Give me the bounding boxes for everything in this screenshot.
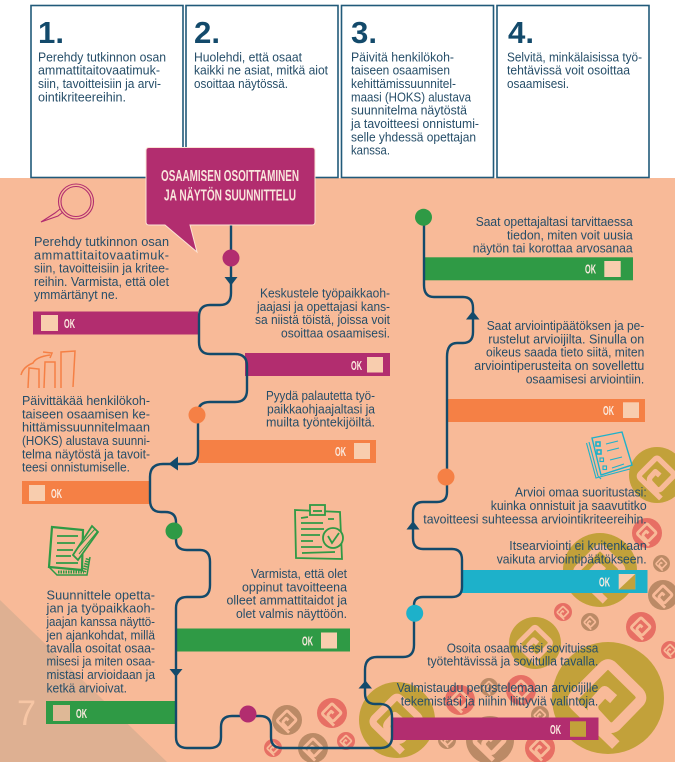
text: varmista: olet valmis näyttöön.: [236, 607, 347, 621]
text: päivittäkää: [22, 394, 150, 475]
step box 4: Selvitä, minkälaisissa työ-: [507, 50, 642, 64]
text: varmista: Varmista, että olet: [251, 567, 347, 581]
text: osoita: [427, 641, 599, 669]
step box 1: [31, 6, 183, 178]
text: perehdy: ymmärtänyt ne.: [34, 288, 118, 302]
bar 6: green middle: [176, 628, 350, 652]
title callout: OSAAMISEN OSOITTAMINEN: [161, 168, 299, 185]
text: suunnittele: jen ajankohdat, millä: [46, 628, 156, 642]
text: pyydä: [266, 389, 376, 430]
text: suunnittele: ketkä arvioivat.: [46, 681, 127, 695]
title callout: [146, 148, 315, 252]
text: perehdy: Perehdy tutkinnon osan: [34, 235, 169, 249]
text: saat arviointipäätöksen: [474, 319, 644, 386]
step box 3: 3.: [351, 15, 377, 50]
bar 7: magenta bottom right: [392, 718, 598, 740]
text: varmista: oppinut tavoitteena: [242, 580, 348, 594]
text: valmistaudu: tekemistäsi ja niihin liittyviä valintoja.: [401, 694, 598, 708]
bar 1: magenta left: [33, 312, 198, 334]
route arrows: [168, 277, 480, 688]
bar 6: green middle: OK: [302, 634, 313, 648]
text: suunnittele: jaajan kanssa näyttö-: [46, 615, 155, 629]
text: arvioi: kuinka onnistuit ja saavutitko: [491, 499, 647, 513]
text: itsearviointi: Itsearviointi ei kuitenkaan: [509, 539, 647, 553]
text: itsearviointi: vaikuta arviointipäätökseen.: [497, 552, 647, 566]
bar 5: green left: [46, 701, 176, 724]
text: suunnittele: Suunnittele opetta-: [46, 588, 155, 602]
bar 9: orange upper right: OK: [603, 403, 614, 418]
text: valmistaudu: Valmistaudu perustelemaan arvioijille: [397, 681, 598, 695]
bar 4: orange left: OK: [51, 486, 62, 501]
text: saat arviointipäätöksen: osaamisesi arviointiin.: [526, 372, 644, 386]
text: suunnittele: [46, 588, 156, 695]
bar 5: green left: OK: [76, 706, 87, 721]
step box 1: 1.: [38, 15, 64, 50]
icon: magnifier: [41, 184, 94, 222]
text: saat arviointipäätöksen: Saat arviointipäätöksen ja pe-: [487, 319, 644, 333]
step box 3: ja tavoitteesi onnistumi-: [350, 117, 479, 131]
text: suunnittele: mistasi arvioidaan ja: [46, 668, 156, 682]
text: saat arviointipäätöksen: oikeus saada tieto siitä, miten: [486, 346, 644, 360]
text: perehdy: [34, 235, 169, 302]
step box 2: [186, 6, 338, 178]
bar 9: orange upper right: [447, 399, 645, 422]
step box 2: osoittaa näytössä.: [194, 77, 288, 91]
text: päivittäkää: Päivittäkää henkilökoh-: [22, 394, 150, 408]
text: suunnittele: jan ja työpaikkaoh-: [46, 602, 155, 616]
bar 4: orange left: [22, 481, 150, 504]
text: arvioi: Arvioi omaa suoritustasi:: [515, 486, 647, 500]
text: perehdy: siin, tavoitteisiin ja kritee-: [34, 262, 169, 276]
background panel: [0, 178, 675, 762]
text: saat opettajaltasi: Saat opettajaltasi tarvittaessa: [476, 215, 634, 229]
text: perehdy: ammattitaitovaatimuk-: [34, 248, 169, 262]
step box 3: taiseen osaamisen: [351, 64, 450, 78]
step box 4: tehtävissä voit osoittaa: [507, 64, 631, 78]
text: päivittäkää: teesi onnistumiselle.: [22, 461, 130, 475]
step box 1: ammattitaitovaatimuk-: [38, 64, 160, 78]
step box 3: Päivitä henkilökoh-: [351, 50, 454, 64]
icon: clipboard with check: [295, 505, 343, 559]
bar 8: cyan: [461, 570, 648, 593]
page number: 7: [17, 694, 36, 733]
text: saat opettajaltasi: tiedon, miten voit uusia: [507, 228, 634, 242]
text: päivittäkää: hittämissuunnitelmaan: [22, 421, 150, 435]
step box 3: selle yhdessä opettajan: [351, 130, 476, 144]
text: pyydä: Pyydä palautetta työ-: [266, 389, 375, 403]
text: perehdy: reihin. Varmista, että olet: [34, 275, 169, 289]
corner triangle: [0, 600, 167, 762]
step box 2: kaikki ne asiat, mitkä aiot: [194, 64, 328, 78]
icon: checklist sheets: [586, 432, 632, 479]
step box 1: Perehdy tutkinnon osan: [38, 50, 166, 64]
route dots: [166, 209, 454, 723]
bar 8: cyan: OK: [599, 574, 610, 590]
step box 3: kehittämissuunnitel-: [351, 77, 456, 91]
text: päivittäkää: telma näytöstä ja tavoit-: [22, 447, 150, 461]
step box 4: [497, 6, 649, 178]
step box 1: siin, tavoitteisiin ja arvi-: [38, 77, 161, 91]
title callout: JA NÄYTÖN SUUNNITTELU: [164, 186, 296, 204]
step box 3: kanssa.: [351, 144, 390, 158]
bar 10: green top right: OK: [585, 262, 596, 276]
text: keskustele: osoittaa osaamisesi.: [281, 326, 390, 340]
text: osoita: työtehtävissä ja sovitulla tavalla.: [427, 655, 598, 669]
bar 2: magenta right: OK: [351, 358, 362, 373]
step box 3: maasi (HOKS) alustava: [351, 90, 472, 104]
text: varmista: olleet ammattitaidot ja: [226, 594, 348, 608]
text: suunnittele: tavalla osoitat osaa-: [46, 641, 155, 655]
text: saat arviointipäätöksen: arviointiperusteita on sovellettu: [474, 359, 644, 373]
text: osoita: Osoita osaamisesi sovituissa: [447, 641, 599, 655]
bar 10: green top right: [424, 257, 633, 280]
bar 3: orange right: [198, 440, 376, 463]
step box 3: suunnitelma näytöstä: [351, 104, 468, 118]
step box 4: osaamisesi.: [507, 77, 569, 91]
text: saat opettajaltasi: näytön tai korottaa arvosanaa: [473, 242, 634, 256]
text: suunnittele: misesi ja miten osaa-: [46, 655, 155, 669]
step box 2: Huolehdi, että osaat: [194, 50, 302, 64]
text: valmistaudu: [397, 681, 598, 708]
icon: notepad and pencil: [49, 526, 98, 575]
text: päivittäkää: (HOKS) alustava suunni-: [22, 434, 150, 448]
step box 3: [342, 6, 494, 178]
text: keskustele: [255, 287, 390, 340]
bar 3: orange right: OK: [335, 444, 346, 459]
text: keskustele: sa niistä töistä, joissa voit: [255, 313, 390, 327]
text: saat arviointipäätöksen: rustelut arvioijilta. Sinulla on: [488, 332, 644, 346]
text: arvioi: tavoitteesi suhteessa arviointikriteereihin.: [423, 512, 647, 526]
text: saat opettajaltasi: [473, 215, 634, 256]
step box 1: ointikriteereihin.: [38, 90, 126, 104]
text: arvioi: [423, 486, 647, 526]
text: pyydä: paikkaohjaajaltasi ja: [267, 402, 376, 416]
text: itsearviointi: [497, 539, 647, 566]
step box 4: 4.: [508, 15, 534, 50]
text: keskustele: Keskustele työpaikkaoh-: [260, 287, 390, 301]
text: keskustele: jaajasi ja opettajasi kans-: [256, 300, 390, 314]
text: varmista: [226, 567, 348, 621]
winding route line: [150, 217, 473, 748]
icon: rising bar chart: [21, 351, 75, 388]
step box 2: 2.: [194, 15, 220, 50]
bar 7: magenta bottom right: OK: [550, 722, 561, 737]
bar 1: magenta left: OK: [64, 316, 75, 331]
decorative logo pattern: [264, 447, 675, 762]
text: päivittäkää: taiseen osaamisen ke-: [22, 407, 150, 421]
bar 2: magenta right: [245, 353, 390, 376]
text: pyydä: muilta työntekijöiltä.: [266, 416, 375, 430]
